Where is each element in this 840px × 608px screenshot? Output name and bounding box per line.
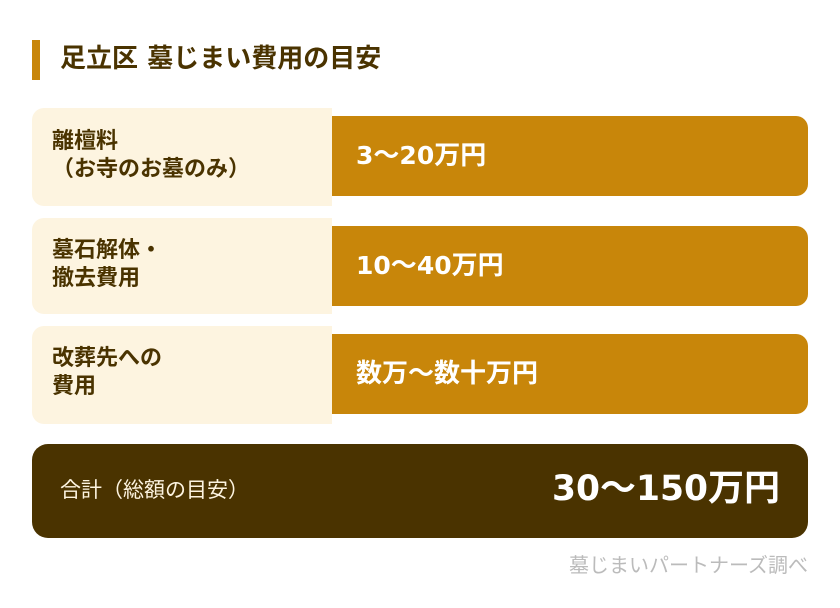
title accent bar (32, 40, 40, 80)
label text (52, 237, 162, 290)
label panel (32, 108, 332, 206)
label text (52, 128, 250, 181)
row: 墓石解体・撤去費用 (32, 218, 808, 314)
value text: 3〜20万円 (356, 140, 486, 170)
total panel (32, 444, 808, 538)
value bar (332, 226, 808, 306)
title text: 足立区 墓じまい費用の目安 (60, 43, 381, 73)
label text: 改葬先への (52, 345, 162, 370)
value text: 10〜40万円 (356, 250, 504, 280)
value bar (332, 334, 808, 414)
title (32, 40, 381, 80)
source note: 墓じまいパートナーズ調べ (569, 555, 808, 577)
label text: 費用 (52, 373, 96, 398)
value bar (332, 116, 808, 196)
label text: 離檀料 (52, 128, 118, 153)
label text: 撤去費用 (52, 265, 140, 290)
total label: 合計（総額の目安） (60, 479, 249, 502)
row: 離檀料 (32, 108, 808, 206)
label text (52, 345, 162, 398)
label text: （お寺のお墓のみ） (52, 156, 250, 181)
label panel (32, 326, 332, 424)
row: 改葬先への費用 (32, 326, 808, 424)
label text: 墓石解体・ (52, 237, 162, 262)
label panel (32, 218, 332, 314)
value text: 数万〜数十万円 (356, 358, 538, 388)
total value: 30〜150万円 (552, 467, 780, 509)
